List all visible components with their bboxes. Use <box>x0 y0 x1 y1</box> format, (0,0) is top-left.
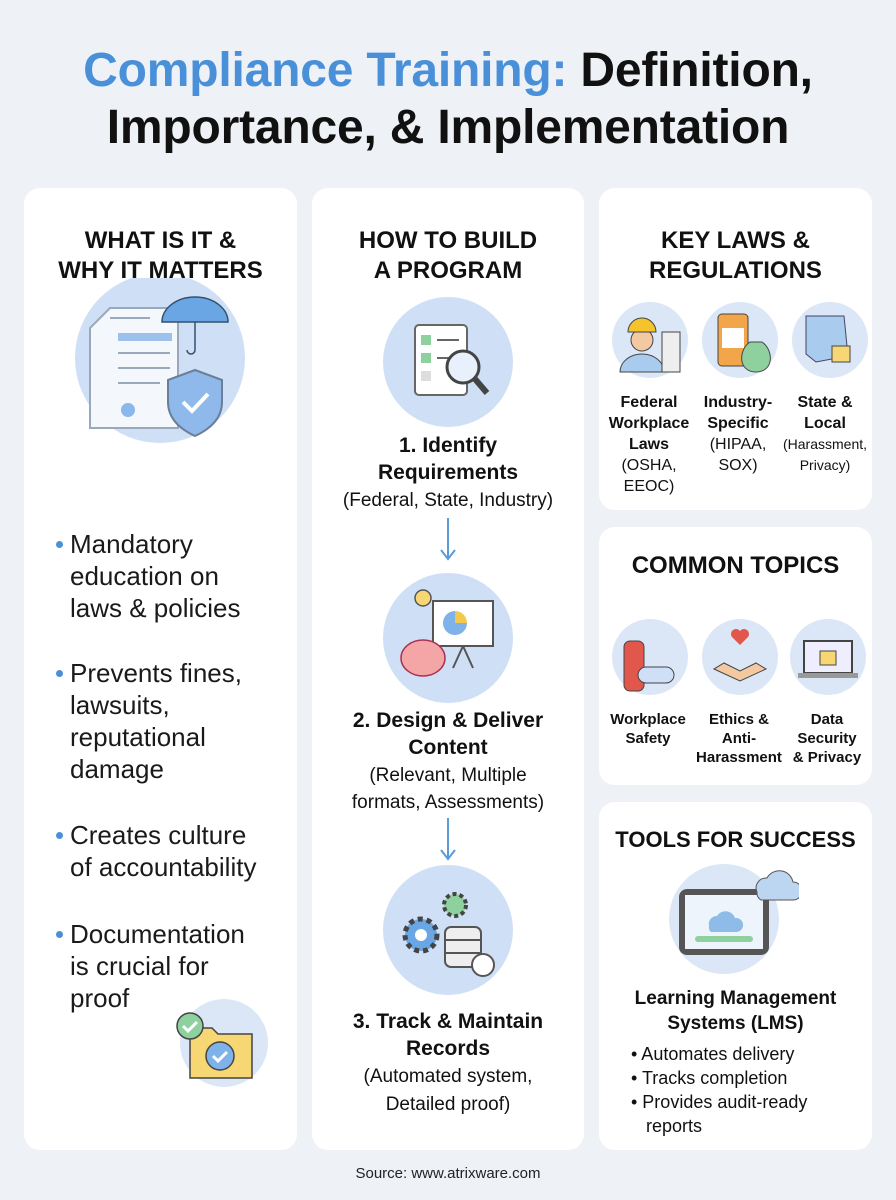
panel: what is it: laws & policies <box>70 593 241 623</box>
LMS bullets <box>631 1044 808 1136</box>
step 1 text: (Federal, State, Industry) <box>343 490 553 511</box>
step 2 text: formats, Assessments) <box>352 792 544 813</box>
title <box>83 44 813 154</box>
step 3 text: (Automated system, <box>364 1066 532 1087</box>
panel: what is it: damage <box>70 754 164 784</box>
step 3 text: Detailed proof) <box>386 1094 510 1115</box>
step 2 text: 2. Design & Deliver <box>353 709 543 732</box>
LMS text: Systems (LMS) <box>667 1013 804 1034</box>
panel: what is it: Prevents fines, <box>70 658 242 688</box>
law labels <box>608 394 867 495</box>
panel: common topics: Ethics & <box>709 711 769 728</box>
step 1 text: 1. Identify <box>399 434 497 457</box>
panel: key laws <box>599 188 872 510</box>
icon: document with umbrella and shield <box>75 278 245 443</box>
panel: key laws: Workplace <box>609 415 689 432</box>
panel: what is it <box>24 188 297 1150</box>
panel: key laws: Local <box>804 415 846 432</box>
panel: common topics: & Privacy <box>793 749 861 766</box>
panel: key laws: Privacy) <box>800 457 850 473</box>
source: Source: www.atrixware.com <box>355 1165 541 1182</box>
LMS bullets: • Tracks completion <box>631 1068 787 1088</box>
LMS bullets: • Provides audit-ready <box>631 1092 807 1112</box>
step 2 text <box>352 709 544 813</box>
LMS text: Learning Management <box>635 988 836 1009</box>
panel: common topics <box>599 527 872 785</box>
step 2 text: (Relevant, Multiple <box>369 765 527 786</box>
icon: tablet cloud <box>669 864 799 974</box>
LMS bullets: • Automates delivery <box>631 1044 794 1064</box>
panel: what is it: Documentation <box>70 919 245 949</box>
panel: tools <box>599 802 872 1150</box>
panel: what is it: proof <box>70 983 129 1013</box>
arrow 2 <box>440 818 456 860</box>
step 3 text: 3. Track & Maintain <box>353 1010 543 1033</box>
panel: key laws: EEOC) <box>624 478 674 495</box>
heading: key laws: KEY LAWS & <box>661 227 810 254</box>
panel: key laws: State & <box>797 394 853 411</box>
icon: checklist magnifier <box>383 297 513 427</box>
panel: common topics: Security <box>797 730 857 747</box>
icons: topics <box>612 619 866 695</box>
step 3 text: Records <box>406 1037 490 1060</box>
arrow 1 <box>440 518 456 560</box>
bullet list <box>56 529 256 1013</box>
panel: key laws: Federal <box>621 394 677 411</box>
panel: key laws: Industry- <box>704 394 772 411</box>
panel: key laws: (HIPAA, <box>710 436 766 453</box>
panel: what is it: lawsuits, <box>70 690 170 720</box>
heading: what is it: WHAT IS IT & <box>85 227 236 254</box>
panel: key laws: SOX) <box>718 457 758 474</box>
title: Importance, & Implementation <box>107 101 789 154</box>
heading: what is it <box>58 227 263 284</box>
panel: what is it: Creates culture <box>70 820 246 850</box>
panel: common topics: Harassment <box>696 749 782 766</box>
icon: gears database <box>383 865 513 995</box>
panel: key laws: (OSHA, <box>621 457 677 474</box>
panel: common topics: Anti- <box>722 730 756 747</box>
panel: key laws: Laws <box>629 436 669 453</box>
heading: how to build <box>359 227 537 284</box>
panel: key laws: (Harassment, <box>783 436 867 452</box>
icons: laws <box>612 302 868 378</box>
icon: folder with checks <box>176 999 268 1087</box>
step 2 text: Content <box>408 736 488 759</box>
panel: common topics: Data <box>811 711 843 728</box>
heading: what is it: WHY IT MATTERS <box>58 257 263 284</box>
panel: what is it: is crucial for <box>70 951 209 981</box>
icon: brain presentation <box>383 573 513 703</box>
heading: how to build: HOW TO BUILD <box>359 227 537 254</box>
LMS bullets: reports <box>646 1116 702 1136</box>
panel: what is it: of accountability <box>70 852 256 882</box>
heading: how to build: A PROGRAM <box>374 257 522 284</box>
heading: common topics: COMMON TOPICS <box>632 552 839 579</box>
step 3 text <box>353 1010 543 1115</box>
panel: common topics: Safety <box>625 730 671 747</box>
panel: common topics: Workplace <box>610 711 686 728</box>
title: Compliance Training: Definition, <box>83 44 813 97</box>
heading: key laws: REGULATIONS <box>649 257 822 284</box>
panel: how to build <box>312 188 584 1150</box>
LMS text <box>635 988 836 1034</box>
step 1 text: Requirements <box>378 461 518 484</box>
panel: what is it: education on <box>70 561 219 591</box>
panel: key laws: Specific <box>707 415 769 432</box>
heading: tools: TOOLS FOR SUCCESS <box>615 827 856 852</box>
topic labels <box>610 711 862 766</box>
panel: what is it: Mandatory <box>70 529 193 559</box>
panel: what is it: reputational <box>70 722 206 752</box>
step 1 text <box>343 434 553 511</box>
heading: key laws <box>649 227 822 284</box>
